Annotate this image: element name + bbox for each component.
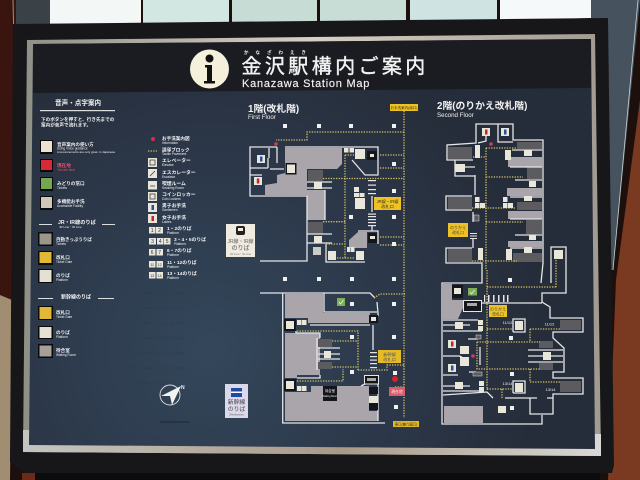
button: you are here: You are here xyxy=(57,168,75,172)
heading: second floor: 2階(のりかえ改札階) xyxy=(437,99,527,112)
button: JR platform xyxy=(38,269,70,283)
button: Shinkansen platform: のりば xyxy=(56,329,70,336)
sign: transfer gate north: のりかえ xyxy=(450,224,466,230)
stairs xyxy=(308,170,332,369)
stairway stripes xyxy=(368,180,377,368)
button: Shinkansen ticket gate: Ticket Gate xyxy=(56,315,72,319)
legend: men's toilet: 男子お手洗 xyxy=(162,202,186,209)
marker: you are here: 現在地 xyxy=(391,389,403,394)
legend: platforms 3-5: 5 xyxy=(166,239,169,245)
sign: bottom exit xyxy=(393,421,419,427)
legend: platforms 3-5: 3・4・5のりば xyxy=(174,236,206,243)
heading: JR and IR lines xyxy=(39,218,115,229)
panel: map legend xyxy=(148,135,206,280)
legend: elevator: Elevator xyxy=(162,163,175,167)
legend: platforms 11-12: 11・12のりば xyxy=(167,259,197,266)
legend: platforms 1-2 xyxy=(149,225,192,235)
icon: north compass xyxy=(160,385,185,405)
number labels: 13/14 xyxy=(545,387,556,392)
sign: transfer gate south xyxy=(489,305,507,317)
legend: platforms 1-2: 1・2のりば xyxy=(167,225,192,232)
button: JR platform: Platform xyxy=(56,278,68,282)
icons and numbered boxes xyxy=(452,145,563,413)
legend: women's toilet xyxy=(148,214,186,224)
icon: green tickets xyxy=(468,288,477,296)
button: Shinkansen platform: Platform xyxy=(56,335,68,339)
button: tickets: みどりの窓口 xyxy=(57,180,85,187)
button: JR ticket gate xyxy=(38,251,72,265)
sign: JR and IR platforms xyxy=(226,224,255,257)
legend: platforms 1-2: 2 xyxy=(158,228,161,234)
legend: platforms 11-12: Platform xyxy=(167,265,179,269)
waiting room label: 待合室 xyxy=(325,388,336,393)
legend: elevator xyxy=(148,157,191,167)
sign: Shinkansen platforms: Shinkansen xyxy=(229,412,244,416)
button: Shinkansen platform xyxy=(38,326,70,339)
sign: transfer gate north xyxy=(448,223,468,237)
floor plan: second floor xyxy=(437,99,583,424)
braille block: ⠁⠃⠉⠙⠑⠋⠛⠓⠊⠚⠅⠇⠍⠝⠕⠏⠟⠗ xyxy=(128,337,186,341)
icon: men's toilet xyxy=(257,155,265,163)
legend: platforms 11-12: 11 xyxy=(150,263,154,267)
legend: men's toilet: Gentlemen xyxy=(162,208,178,212)
button: accessible facility: Accessible Facility xyxy=(57,204,83,208)
legend: smoking room: 喫煙ルーム xyxy=(162,180,186,187)
legend: platforms 6-7: Platform xyxy=(167,253,179,257)
legend: platforms 13-14: 14 xyxy=(158,274,162,278)
button: JR tickets: 自動きっぷうりば xyxy=(56,236,92,243)
button: voice guidance: Using Voice guidance xyxy=(57,146,88,150)
legend: platforms 3-5: 4 xyxy=(159,239,162,245)
button: tickets xyxy=(40,177,85,191)
braille block: ⠁⠃⠉⠙⠑⠋⠛⠓⠊⠚⠅⠇⠍⠝⠕⠏⠟⠗ xyxy=(128,352,186,356)
heading: first floor: First Floor xyxy=(248,114,276,121)
legend: coin lockers: コインロッカー xyxy=(162,191,196,198)
background windows xyxy=(50,0,591,29)
legend: platforms 13-14: 13 xyxy=(150,274,154,278)
legend: platforms 13-14: Platform xyxy=(167,276,179,280)
stairway stripes xyxy=(470,233,508,302)
sign: Shinkansen ticket gate: 改札口 xyxy=(383,356,396,363)
floor plan: first floor xyxy=(248,102,419,427)
sign: transfer gate south: 改札口 xyxy=(492,310,504,316)
legend: women's toilet: Ladies xyxy=(162,220,172,224)
legend: platforms 13-14 xyxy=(149,270,197,280)
legend: platforms 6-7: 7 xyxy=(158,250,161,256)
button: Shinkansen ticket gate xyxy=(38,306,72,320)
legend: tactile paving: Tactile Pavement xyxy=(162,152,186,156)
number labels: 11/12 xyxy=(545,322,555,326)
title xyxy=(242,49,429,90)
button: JR tickets: Tickets xyxy=(56,242,66,246)
mounting squares xyxy=(283,124,514,410)
sign: Shinkansen platforms: のりば xyxy=(228,405,245,413)
braille block: ⠁⠃⠉⠙⠑⠋⠛⠓⠊⠚⠅⠇⠍⠝⠕⠏⠟⠗ xyxy=(128,322,186,326)
stairs xyxy=(448,142,581,392)
sign: Shinkansen ticket gate xyxy=(378,350,401,363)
heading: first floor xyxy=(248,102,299,121)
title: 金沢駅構内ご案内 xyxy=(242,55,429,78)
legend: information: Information xyxy=(162,141,178,145)
sign: JR ticket gate: JR線・IR線 xyxy=(377,198,399,205)
walls xyxy=(250,147,385,423)
button: JR tickets xyxy=(38,232,92,246)
button: accessible facility xyxy=(40,196,85,210)
legend: coin lockers xyxy=(148,191,196,201)
heading: second floor xyxy=(437,99,527,119)
tactile paving routes xyxy=(472,148,560,398)
icon: men's toilets xyxy=(448,128,509,372)
braille block: ⠁⠃⠉⠙⠑⠋⠛⠓⠊⠚⠅⠇⠍⠝⠕ xyxy=(128,382,176,386)
icon: information xyxy=(190,50,229,88)
button: accessible facility: 多機能お手洗 xyxy=(57,198,85,205)
legend: platforms 6-7: 6 xyxy=(151,250,154,256)
tactile paving routes xyxy=(276,111,405,418)
legend: coin lockers: Coin Lockers xyxy=(162,197,181,201)
panel: voice and braille guide xyxy=(38,98,116,358)
marker: you are here xyxy=(389,376,405,396)
walls xyxy=(442,124,583,424)
instructions: 案内が音声で流れます。 xyxy=(41,122,91,128)
instructions xyxy=(41,116,115,128)
sign: top exit: お手洗案内(南口) xyxy=(391,105,417,110)
icon: north compass: N xyxy=(181,385,185,391)
scale bar xyxy=(160,421,190,423)
icon: accessible toilet xyxy=(286,163,296,174)
legend: women's toilet: 女子お手洗 xyxy=(162,214,186,221)
sign: bottom exit: 東口(兼六園口) xyxy=(395,422,417,426)
button: voice guidance: Announcements are only given in Japanese xyxy=(57,150,116,154)
sign: transfer gate north: 改札口 xyxy=(452,229,464,235)
legend: platforms 13-14: 13・14のりば xyxy=(167,270,197,277)
legend: platforms 3-5: 3 xyxy=(151,239,154,245)
braille block: ⠁⠃⠉⠙⠑⠋⠛⠓⠊⠚⠅⠇⠍⠝⠕⠏⠟⠗ xyxy=(128,367,186,371)
button: tickets: Tickets xyxy=(57,186,67,190)
legend: information xyxy=(151,135,190,145)
legend: information: お手洗案内図 xyxy=(162,135,190,142)
sign: Shinkansen platforms: 新幹線 xyxy=(228,398,245,406)
red dot xyxy=(274,142,278,146)
legend: men's toilet xyxy=(148,202,186,212)
heading: JR and IR lines: JR Line・IR Line xyxy=(59,225,82,229)
legend: platforms 6-7 xyxy=(149,247,192,257)
legend: platforms 1-2: Platform xyxy=(167,231,179,235)
sign: Shinkansen ticket gate: 新幹線 xyxy=(383,351,397,358)
heading: Shinkansen xyxy=(38,294,114,300)
legend: tactile paving xyxy=(148,146,190,156)
button: Shinkansen ticket gate: 改札口 xyxy=(56,309,70,316)
number labels: 13/14 xyxy=(502,381,513,386)
number labels: 11/12 xyxy=(503,320,513,325)
button: you are here xyxy=(40,159,75,172)
icon: women's toilets xyxy=(448,128,490,348)
icon: green tickets xyxy=(337,298,345,306)
floor areas xyxy=(443,157,542,423)
legend: platforms 6-7: 6・7のりば xyxy=(167,247,192,254)
braille block: ⠁⠃⠉⠙⠑⠋⠛⠓⠊⠚⠅⠇⠍⠝⠕⠏⠟⠗ xyxy=(128,292,186,296)
button: JR ticket gate: Ticket Gate xyxy=(56,260,72,264)
legend: platforms 3-5 xyxy=(149,236,206,246)
number labels xyxy=(502,320,556,392)
sign: top exit xyxy=(390,104,418,111)
sign: Shinkansen platforms xyxy=(225,384,248,418)
sign: JR ticket gate: 改札口 xyxy=(381,203,394,210)
icons and numbered boxes xyxy=(284,148,378,410)
button: you are here: 現在地 xyxy=(57,162,71,169)
legend: tactile paving: 誘導ブロック xyxy=(162,146,190,154)
sign: JR and IR platforms: のりば xyxy=(231,244,250,252)
button: JR platform: のりば xyxy=(56,272,70,279)
braille block: ⠁⠃⠉⠙⠑⠋⠛⠓⠊⠚⠅⠇⠍⠝⠕⠏⠟⠗ xyxy=(128,307,186,311)
red dots xyxy=(471,142,493,358)
icon: women's toilet xyxy=(254,177,262,185)
legend: platforms 3-5: Platform xyxy=(174,242,186,246)
legend: smoking room xyxy=(148,180,186,190)
box: dark room xyxy=(464,300,482,312)
header band xyxy=(33,39,591,93)
legend: escalator: Escalator xyxy=(162,175,176,179)
sign: JR and IR platforms: JR Line・IR Line xyxy=(230,252,252,256)
sign: JR ticket gate xyxy=(374,197,401,210)
waiting room label xyxy=(323,386,337,401)
heading: Shinkansen: 新幹線のりば xyxy=(61,294,91,300)
button: waiting room: 待合室 xyxy=(56,347,70,354)
heading: first floor: 1階(改札階) xyxy=(248,102,299,115)
legend: elevator: エレベーター xyxy=(162,157,191,164)
waiting room label: Waiting Room xyxy=(323,395,337,398)
legend: platforms 11-12 xyxy=(149,259,197,269)
floor areas xyxy=(265,148,378,421)
heading: 音声・点字案内 xyxy=(55,98,102,107)
title: Kanazawa Station Map xyxy=(242,78,370,90)
sign: transfer gate south: のりかえ xyxy=(490,306,506,312)
button: voice guidance xyxy=(40,140,116,154)
heading: second floor: Second Floor xyxy=(437,112,474,119)
legend: platforms 11-12: 12 xyxy=(158,263,162,267)
legend: smoking room: Smoking Room xyxy=(162,186,184,190)
button: waiting room xyxy=(38,344,76,358)
legend: escalator xyxy=(148,169,196,179)
legend: escalator: エスカレーター xyxy=(162,169,196,176)
button: JR ticket gate: 改札口 xyxy=(56,254,70,261)
title: かなざわえき xyxy=(244,49,313,56)
heading: JR and IR lines: JR・IR線のりば xyxy=(58,218,97,226)
legend: platforms 1-2: 1 xyxy=(151,228,154,234)
sign: JR and IR platforms: JR線・IR線 xyxy=(227,238,254,245)
button: waiting room: Waiting Room xyxy=(56,353,76,357)
instructions: 下のボタンを押すと、行き先までの xyxy=(41,116,115,123)
braille block xyxy=(128,292,186,386)
button: voice guidance: 音声案内の使い方 xyxy=(57,141,94,148)
